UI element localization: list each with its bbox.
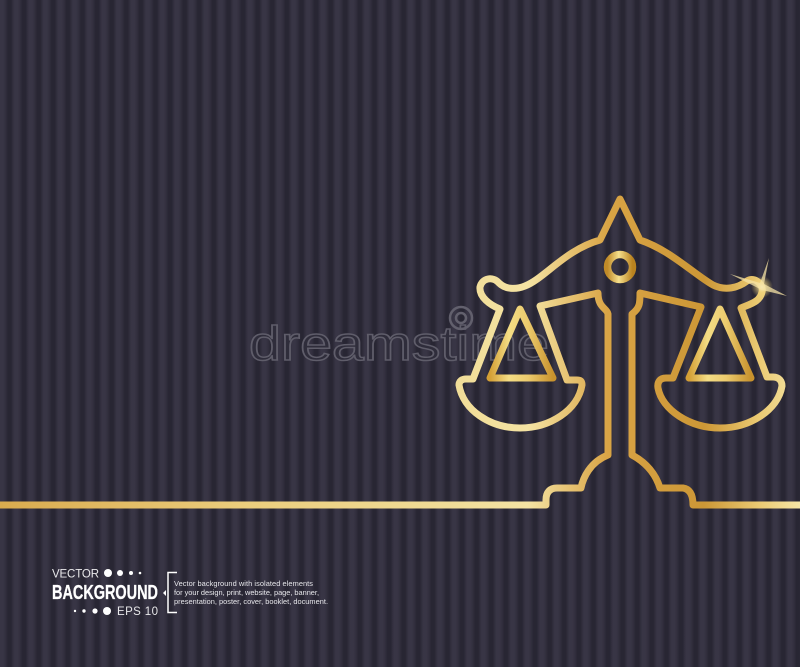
- description: Vector background with isolated elements: [174, 579, 313, 588]
- watermark: dreamstime: [249, 307, 549, 371]
- scales of justice outline with horizon line: [0, 199, 800, 505]
- sparkle: [730, 258, 787, 298]
- description: for your design, print, website, page, banner,: [174, 588, 319, 597]
- right triangle weight: [689, 309, 751, 378]
- watermark: dreamstime: dreamstime: [249, 318, 549, 371]
- dots bottom: [74, 607, 111, 615]
- EPS 10 text: EPS 10: [117, 606, 158, 618]
- bracket pointer: [163, 590, 166, 596]
- VECTOR text: VECTOR: [52, 568, 99, 580]
- bracket: [168, 572, 177, 612]
- description: [174, 579, 328, 606]
- dots top: [104, 569, 141, 577]
- label: vector background eps 10: [52, 568, 328, 618]
- BACKGROUND text: BACKGROUND: [52, 582, 158, 604]
- pivot ring: [608, 254, 632, 280]
- left triangle weight: [490, 309, 553, 378]
- description: presentation, poster, cover, booklet, document.: [174, 597, 328, 606]
